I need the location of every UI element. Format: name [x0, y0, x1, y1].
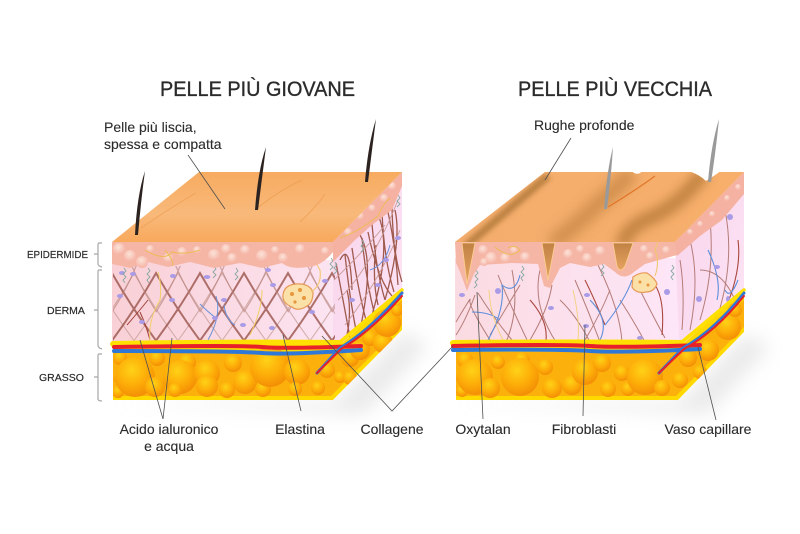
callout: pelle più liscia: [104, 119, 222, 152]
fine surface lines: [141, 180, 325, 228]
callout: vaso capillare: Vaso capillare: [665, 421, 752, 437]
collagen mesh: [113, 200, 402, 344]
epidermis side: [333, 172, 402, 262]
panel: young skin block: [112, 119, 428, 414]
title: older skin: PELLE PIÙ VECCHIA: [518, 78, 712, 101]
layer labels with brackets: [27, 243, 102, 401]
leader lines: [140, 138, 716, 420]
fibroblast dots: [459, 214, 733, 340]
blood vessels: [113, 290, 402, 373]
dermis side: [333, 172, 402, 360]
elastin and capillary branches: [127, 245, 390, 340]
fat layer: [112, 290, 403, 400]
nerve endings: [495, 246, 520, 254]
label: grasso: GRASSO: [39, 372, 84, 384]
label: epidermide: [27, 243, 102, 267]
surface dips at back edge: [632, 172, 720, 181]
epidermal cells: [113, 182, 396, 268]
label: derma: DERMA: [47, 305, 85, 317]
dermis front: [455, 258, 679, 348]
callout: pelle più liscia: spessa e compatta: [104, 136, 222, 152]
panel: old skin block: [453, 119, 770, 414]
sweat pore: [309, 238, 323, 242]
oxytalan squiggles: [123, 195, 400, 283]
wrinkled top surface: [455, 172, 744, 242]
deep wrinkle shading: [466, 172, 704, 246]
title: younger skin: PELLE PIÙ GIOVANE: [160, 78, 355, 101]
dermis front: [112, 260, 334, 348]
epidermis side: [675, 172, 744, 256]
sebaceous gland: [632, 242, 658, 292]
grey hairs: [604, 119, 719, 209]
degraded fibres: [456, 210, 739, 342]
sweat pore: [650, 238, 662, 242]
callout: rughe profonde: Rughe profonde: [534, 117, 635, 133]
epidermis front: [112, 242, 333, 268]
epidermal cells: [478, 184, 741, 266]
callout: acido ialuronico: [120, 421, 219, 454]
nerve endings: [145, 198, 390, 266]
label: grasso: [39, 354, 102, 401]
callout: fibroblasti: Fibroblasti: [552, 421, 616, 437]
fat layer: [455, 290, 744, 400]
callout: acido ialuronico: Acido ialuronico: [120, 421, 219, 437]
callout: collagene: Collagene: [360, 421, 424, 437]
blood vessels: [453, 290, 744, 373]
callout: acido ialuronico: e acqua: [144, 438, 194, 454]
dermis side: [675, 172, 744, 360]
fibroblast dots: [117, 236, 401, 330]
hairs: [135, 119, 376, 235]
oxytalan squiggles: [474, 264, 674, 288]
sebaceous gland: [283, 250, 320, 309]
drop shadow: [112, 332, 428, 414]
skin top surface: [112, 172, 402, 242]
wrinkle notches: [462, 243, 633, 284]
callout: pelle più liscia: Pelle più liscia,: [104, 119, 197, 135]
drop shadow: [456, 334, 770, 414]
label: epidermide: EPIDERMIDE: [27, 249, 88, 261]
epidermis front with wrinkles: [455, 242, 677, 291]
label: derma: [47, 270, 102, 349]
callout: oxytalan: Oxytalan: [455, 421, 511, 437]
callout: elastina: Elastina: [275, 421, 325, 437]
